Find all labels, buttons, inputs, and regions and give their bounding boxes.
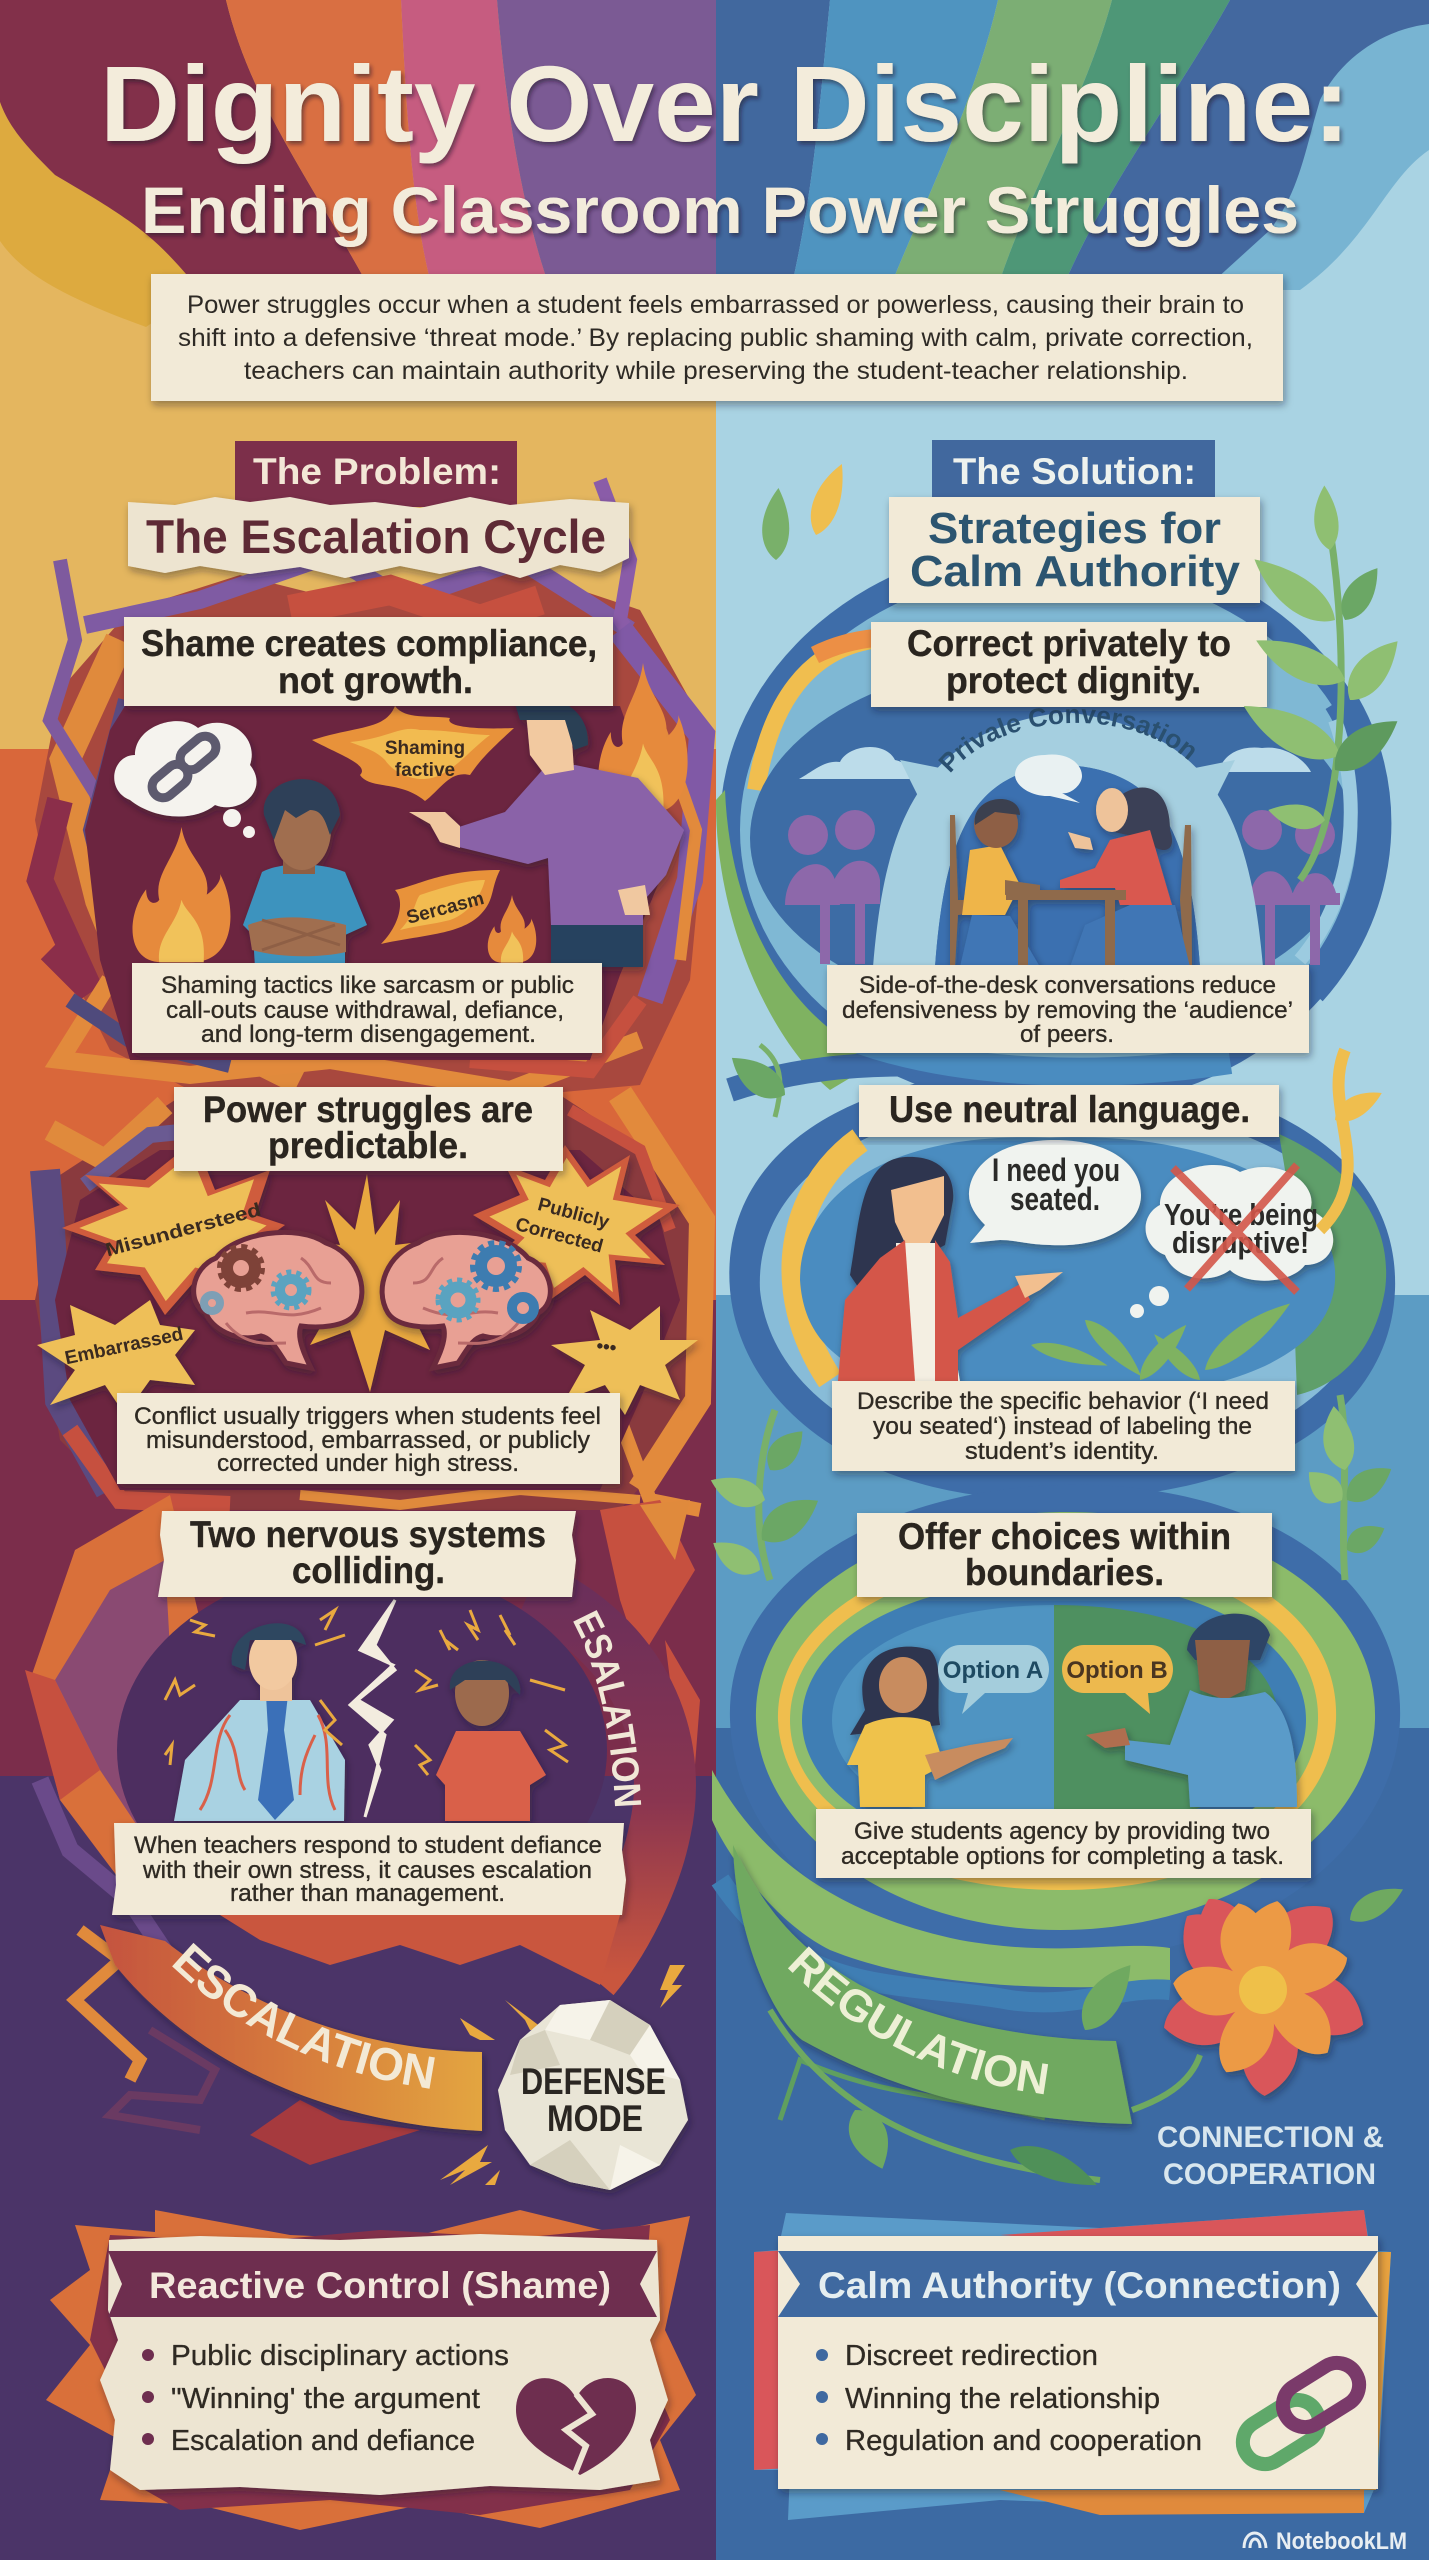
text: shame caption: call-outs cause withdrawal, defiance, [166, 997, 564, 1024]
text: teacher stress caption: rather than management. [230, 1880, 505, 1907]
icon: crumpled ball defense mode: DEFENSE [521, 2061, 666, 2102]
icon: lower sprigs [706, 1045, 1398, 1583]
heading: the problem tag: The Problem: [253, 451, 501, 492]
callout: I need you seated [969, 1140, 1141, 1245]
ribbon: regulation banner [732, 1846, 1137, 2132]
callout: crossed-out thought: You’re being [1164, 1197, 1318, 1232]
callout: shaming tactics flame: factive [395, 760, 455, 781]
callout: shaming tactics flame: Shaming [385, 738, 465, 759]
icon: flames [133, 663, 688, 963]
label: burst words [63, 1194, 618, 1369]
text: correct privately heading [871, 622, 1267, 707]
icon: left brain with gears [194, 1232, 362, 1368]
text: shame caption: and long-term disengagement. [201, 1021, 536, 1048]
text: conflict caption: misunderstood, embarrassed, or publicly [146, 1427, 590, 1454]
panel: reactive control card [46, 2210, 696, 2530]
ribbon: escalation arc, right side: ESALATION [573, 1610, 642, 1806]
text: neutral caption: Describe the specific behavior (‘I need [857, 1388, 1269, 1415]
header paper rays [0, 0, 1429, 327]
list: calm authority bullets: Regulation and cooperation [845, 2425, 1202, 2457]
right swirl: loop 1 bands [716, 540, 1390, 1110]
text: correct privately heading: Correct privately to [907, 623, 1231, 664]
right swirl: loop 3 bands [712, 1485, 1400, 2002]
text: conflict caption [117, 1393, 620, 1484]
text: correct privately heading: protect dignity. [946, 660, 1201, 701]
background: right column colour blocks [716, 0, 1429, 2560]
text: shame creates compliance heading: not growth. [278, 660, 473, 701]
illustration: student with crossed arms [243, 779, 367, 967]
icon: stress sparks [165, 1530, 568, 1775]
panel: predictable scene background [55, 1150, 680, 1490]
icon: top leaves beside solution heading [761, 459, 853, 560]
label: burst words: Corrected [513, 1214, 605, 1258]
icon: right vine [1235, 485, 1409, 880]
illustration: seated teacher and student at table [950, 788, 1192, 967]
text: neutral caption [832, 1381, 1295, 1471]
list: calm authority bullets: Discreet redirection [845, 2340, 1098, 2372]
ribbon: escalation banner [100, 1925, 487, 2138]
intro text card: shift into a defensive ‘threat mode.’ By replacing public shaming with calm, private correction, [178, 324, 1253, 352]
heading: strategies for calm authority [889, 497, 1260, 603]
text: offer choices heading: boundaries. [965, 1552, 1164, 1593]
icon: interlocking links [1235, 2355, 1367, 2472]
text: shame caption [132, 963, 602, 1053]
text: offer choices caption [816, 1809, 1311, 1878]
title [100, 43, 1350, 247]
panel: colliding scene background [117, 1565, 607, 1935]
text: power struggles heading [174, 1087, 563, 1171]
intro text card: Power struggles occur when a student feels embarrassed or powerless, causing their brain to [187, 291, 1244, 319]
text: neutral language heading: Use neutral language. [889, 1089, 1250, 1130]
callout: crossed-out thought: disruptive! [1172, 1225, 1309, 1260]
label: burst words: ••• [595, 1336, 618, 1359]
illustration: shouting teacher pointing [409, 696, 684, 967]
illustration: defiant student [436, 1660, 546, 1821]
banner: reactive control title: Reactive Control (Shame) [149, 2265, 611, 2306]
icon: clouds [799, 747, 1311, 779]
ribbon: torn edge below caption [220, 1915, 620, 1985]
icon: vine leaves lower [770, 1878, 1408, 2196]
callout: sarcasm flame: Sercasm [404, 888, 486, 929]
label: burst words: Embarrassed [63, 1324, 185, 1369]
list: reactive control bullets: "Winning' the argument [171, 2383, 480, 2415]
logo: NotebookLM: NotebookLM [1276, 2528, 1407, 2555]
text: private caption: defensiveness by removing the ‘audience’ [842, 997, 1293, 1024]
illustration: peers silhouettes [785, 810, 1340, 965]
icon: trigger bursts [37, 1140, 698, 1415]
callout: option B [1062, 1645, 1173, 1714]
text: power struggles heading: Power struggles are [203, 1089, 533, 1130]
heading: strategies for calm authority: Calm Authority [910, 547, 1241, 596]
text: teacher stress caption: with their own stress, it causes escalation [142, 1857, 592, 1884]
text: shame creates compliance heading: Shame creates compliance, [141, 623, 597, 664]
callout: crossed-out thought [1130, 1165, 1333, 1318]
intro text card: teachers can maintain authority while preserving the student-teacher relationship. [244, 357, 1188, 385]
left frame 3: crumpled paper stack [25, 1495, 700, 2165]
list: reactive control bullets: Public disciplinary actions [171, 2340, 509, 2372]
ribbon: escalation banner: ESCALATION [172, 1942, 435, 2089]
text: conflict caption: corrected under high stress. [217, 1450, 519, 1477]
icon: lightning bolt [350, 1600, 395, 1817]
callout: option A: Option A [943, 1657, 1043, 1684]
text: two nervous systems heading [158, 1511, 576, 1597]
background: left column colour blocks [0, 0, 716, 2560]
text: private caption: of peers. [1020, 1021, 1114, 1048]
callout: I need you seated: I need you [992, 1152, 1120, 1188]
ribbon: regulation banner: REGULATION [788, 1946, 1048, 2094]
heading: the solution tag [932, 440, 1215, 500]
text: teacher stress caption [112, 1823, 626, 1915]
heading: the solution tag: The Solution: [953, 451, 1196, 492]
banner: calm authority title [778, 2251, 1378, 2317]
callout: sarcasm flame [381, 870, 500, 944]
text: offer choices caption: acceptable options for completing a task. [841, 1843, 1284, 1870]
list: calm authority bullets [816, 2340, 1202, 2457]
icon: right brain with gears [382, 1232, 550, 1368]
text: shame caption: Shaming tactics like sarcasm or public [161, 972, 574, 999]
label: burst words: Misundersteed [103, 1200, 263, 1261]
arch: private conversation: Privale Conversation [938, 708, 1195, 772]
banner: reactive control title [108, 2251, 657, 2317]
icon: grass leaves [1029, 1293, 1297, 1386]
list: reactive control bullets [142, 2340, 509, 2457]
text: private caption: Side-of-the-desk conversations reduce [859, 972, 1276, 999]
callout: option A [938, 1645, 1049, 1714]
icon: sparks around crumpled ball [440, 1965, 685, 2185]
heading: the escalation cycle torn paper: The Escalation Cycle [146, 510, 606, 563]
icon: crumpled ball defense mode: MODE [547, 2098, 643, 2139]
text: two nervous systems heading: Two nervous systems [190, 1514, 546, 1555]
text: connection and cooperation: COOPERATION [1163, 2158, 1376, 2191]
heading: the escalation cycle torn paper [128, 497, 629, 578]
icon: paper flower [1158, 1888, 1376, 2100]
arch: private conversation [873, 708, 1263, 965]
icon: broken heart [516, 2378, 636, 2476]
label: burst words: Publicly [535, 1194, 612, 1233]
icon: thought cloud with broken chain [114, 721, 257, 838]
banner: calm authority title: Calm Authority (Connection) [818, 2265, 1341, 2306]
illustration: student offering choice [847, 1647, 1013, 1807]
text: offer choices caption: Give students agency by providing two [854, 1818, 1270, 1845]
heading: strategies for calm authority: Strategies for [928, 504, 1221, 553]
text: shame creates compliance heading [124, 617, 613, 706]
panel: calm authority card [754, 2210, 1391, 2520]
intro text card [151, 274, 1283, 401]
text: connection and cooperation [1157, 2121, 1384, 2191]
text: neutral caption: you seated‘) instead of labeling the [873, 1413, 1252, 1440]
icon: speech bubble [1015, 755, 1082, 803]
title: Dignity Over Discipline: [100, 43, 1350, 164]
left frame 1: torn paper ribbons [35, 480, 704, 1105]
list: reactive control bullets: Escalation and defiance [171, 2425, 475, 2457]
text: conflict caption: Conflict usually triggers when students feel [134, 1403, 601, 1430]
text: power struggles heading: predictable. [268, 1125, 468, 1166]
list: calm authority bullets: Winning the relationship [845, 2383, 1160, 2415]
text: private caption [827, 965, 1309, 1053]
text: offer choices heading: Offer choices within [898, 1516, 1231, 1557]
callout: I need you seated: seated. [1010, 1181, 1100, 1217]
ribbon: escalation arc, right side [522, 1578, 696, 1995]
illustration: stressed teacher [174, 1623, 345, 1821]
text: offer choices heading [857, 1513, 1272, 1597]
text: teacher stress caption: When teachers respond to student defiance [134, 1832, 602, 1859]
heading: the problem tag [235, 441, 517, 507]
right swirl: loop 2 bands [729, 1040, 1395, 1500]
icon: crumpled ball defense mode [498, 2000, 688, 2190]
illustration: private conversation scene [785, 708, 1340, 965]
title: Ending Classroom Power Struggles [141, 173, 1299, 247]
text: connection and cooperation: CONNECTION & [1157, 2121, 1384, 2154]
callout: option B: Option B [1066, 1657, 1168, 1684]
illustration: teacher offering choice [1086, 1614, 1297, 1807]
panel: shame scene background [85, 706, 660, 1060]
text: neutral caption: student’s identity. [965, 1438, 1159, 1465]
callout: shaming tactics flame [312, 706, 514, 801]
text: two nervous systems heading: colliding. [292, 1550, 445, 1591]
left frame 2: torn paper ribbons [35, 1094, 710, 1510]
illustration: neutral language teacher [838, 1157, 1063, 1381]
